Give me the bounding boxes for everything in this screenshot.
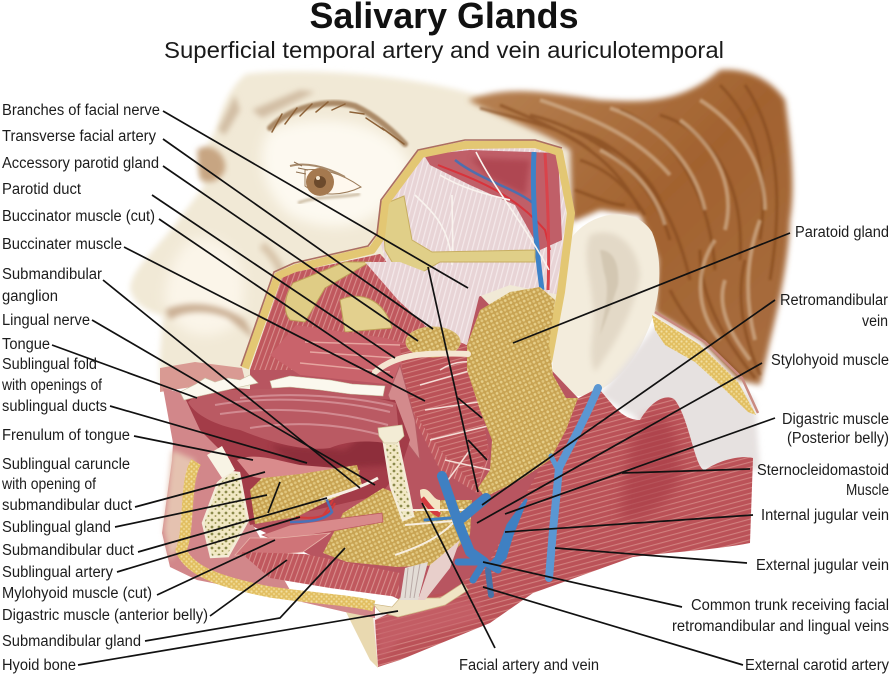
label: Branches of facial nerve: Branches of facial nerve bbox=[2, 102, 160, 119]
label: Internal jugular vein: Internal jugular vein bbox=[761, 507, 889, 524]
internal jugular vein bbox=[488, 500, 526, 570]
label: Buccinator muscle (cut) bbox=[2, 208, 393, 378]
label: Hyoid bone bbox=[2, 611, 398, 674]
lower front tooth bbox=[207, 446, 235, 478]
label: Common trunk bbox=[483, 562, 889, 635]
eyebrow bbox=[270, 102, 405, 144]
label: Transverse facial artery: Transverse facial artery bbox=[2, 128, 156, 145]
oral cavity and floor of mouth bbox=[186, 388, 410, 525]
upper teeth bbox=[180, 375, 385, 400]
label: Retromandibular vein: vein bbox=[862, 313, 888, 330]
mandible front section bbox=[203, 472, 248, 557]
label: Parotid duct: Parotid duct bbox=[2, 181, 82, 198]
label: Sternocleidomastoid Muscle: Muscle bbox=[846, 482, 889, 499]
label: Digastric muscle (anterior belly): Digastric muscle (anterior belly) bbox=[2, 607, 208, 624]
label: Common trunk: retromandibular and lingual veins bbox=[672, 618, 889, 635]
label: Facial artery and vein bbox=[422, 503, 599, 674]
label: External carotid artery: External carotid artery bbox=[745, 657, 889, 674]
submandibular duct and sublingual artery bbox=[262, 478, 383, 542]
hyoid bone and tendon bbox=[373, 510, 470, 617]
external jugular vein bbox=[549, 388, 598, 578]
veins bbox=[425, 388, 598, 595]
label: Buccinater muscle bbox=[2, 236, 425, 401]
label: Transverse facial artery bbox=[2, 128, 433, 329]
label: Sublingual gland bbox=[2, 482, 280, 536]
label: Sublingual gland: Sublingual gland bbox=[2, 519, 111, 536]
label: Submandibular ganglion bbox=[2, 266, 360, 488]
label: Facial artery and vein: Facial artery and vein bbox=[459, 657, 599, 674]
label: Mylohyoid muscle (cut) bbox=[2, 540, 275, 602]
label: Sublingual caruncle: with opening of bbox=[1, 476, 97, 493]
ear bbox=[552, 214, 659, 396]
cheek muscles bbox=[250, 254, 492, 495]
label: External jugular vein: External jugular vein bbox=[756, 557, 889, 574]
lips and upper gum bbox=[160, 362, 245, 392]
label: Retromandibular vein bbox=[482, 292, 888, 505]
yellow fat border of dissection bbox=[245, 144, 571, 368]
label: Digastric muscle (anterior belly) bbox=[2, 560, 287, 624]
label: Sublingual caruncle: submandibular duct bbox=[2, 497, 133, 514]
label: Tongue: Tongue bbox=[2, 336, 50, 353]
label: Sublingual fold with openings of sublingual ducts: sublingual ducts bbox=[2, 398, 107, 415]
label: Buccinater muscle: Buccinater muscle bbox=[2, 236, 122, 253]
label: Internal jugular vein bbox=[505, 507, 889, 532]
label: Digastric muscle (Posterior belly) bbox=[505, 411, 889, 514]
label: Digastric muscle (Posterior belly): Digastric muscle bbox=[782, 411, 889, 428]
label: Sublingual caruncle bbox=[1, 456, 265, 514]
eye bbox=[290, 162, 361, 203]
label: Sublingual artery bbox=[2, 517, 300, 581]
neck skin fold: yellow fat edge bbox=[652, 312, 758, 415]
neck upper white fascia bbox=[600, 320, 760, 470]
facial artery stump bbox=[420, 489, 440, 515]
zygomatic arch bbox=[382, 196, 535, 278]
label: Submandibular gland: Submandibular gland bbox=[2, 633, 141, 650]
label: Sublingual fold with openings of sublingual ducts bbox=[1, 356, 307, 463]
facial nerve pointer lines bbox=[428, 267, 487, 492]
frenulum and sublingual fold bbox=[237, 457, 360, 480]
neck muscle: sternocleidomastoid bbox=[375, 388, 753, 667]
label: Mylohyoid muscle (cut): Mylohyoid muscle (cut) bbox=[2, 585, 152, 602]
subtitle: Superficial temporal artery and vein auriculotemporal bbox=[164, 37, 724, 63]
submandibular gland bbox=[323, 488, 472, 567]
parotid gland bbox=[467, 287, 578, 497]
label: Submandibular ganglion: ganglion bbox=[2, 288, 58, 305]
label: Stylohyoid muscle bbox=[477, 352, 889, 523]
tongue bbox=[188, 389, 400, 449]
hair bbox=[468, 70, 792, 385]
illustration: dissected head bbox=[130, 70, 792, 668]
hair strands light bbox=[540, 100, 765, 360]
face highlights and shading bbox=[262, 120, 410, 227]
label: Paratoid gland: Paratoid gland bbox=[795, 224, 889, 241]
retromandibular vein and branches bbox=[425, 476, 498, 595]
label: Retromandibular vein: Retromandibular bbox=[780, 292, 888, 309]
face skin bbox=[130, 72, 575, 390]
right labels bbox=[477, 224, 889, 674]
label: Sternocleidomastoid Muscle: Sternocleidomastoid bbox=[757, 462, 889, 479]
label: Submandibular ganglion: Submandibular bbox=[2, 266, 102, 283]
digastric anterior belly bbox=[240, 552, 400, 597]
accessory parotid gland bbox=[406, 327, 460, 357]
parotid duct bbox=[375, 353, 468, 372]
label: Accessory parotid gland bbox=[2, 155, 418, 341]
mandible ramus section bbox=[378, 425, 413, 520]
label: Digastric muscle (Posterior belly): (Posterior belly) bbox=[787, 430, 889, 447]
label: Lingual nerve bbox=[2, 312, 375, 485]
label: External carotid artery bbox=[483, 587, 889, 674]
chin and jaw tissue bbox=[162, 388, 375, 618]
label: Tongue bbox=[2, 336, 197, 398]
mylohyoid muscle bbox=[235, 533, 330, 556]
label: Buccinator muscle (cut): Buccinator muscle (cut) bbox=[2, 208, 155, 225]
label: Sublingual caruncle: Sublingual caruncle bbox=[2, 456, 130, 473]
label: Hyoid bone: Hyoid bone bbox=[2, 657, 76, 674]
label: Sublingual fold with openings of sublingual ducts: with openings of bbox=[1, 377, 103, 394]
lower neck edge strip bbox=[345, 606, 378, 668]
label: Branches of facial nerve bbox=[2, 102, 468, 288]
label: Submandibular gland bbox=[2, 548, 345, 650]
label: Common trunk: Common trunk receiving facial bbox=[691, 597, 889, 614]
label: Frenulum of tongue bbox=[2, 427, 253, 460]
label: External jugular vein bbox=[555, 548, 889, 574]
label: Accessory parotid gland: Accessory parotid gland bbox=[2, 155, 159, 172]
label: Sublingual fold with openings of sublingual ducts: Sublingual fold bbox=[2, 356, 97, 373]
base of dissected deep tissue bbox=[250, 254, 578, 600]
hair strands dark bbox=[480, 85, 777, 378]
left labels bbox=[1, 102, 468, 674]
label: Frenulum of tongue: Frenulum of tongue bbox=[2, 427, 130, 444]
label: Sternocleidomastoid Muscle bbox=[622, 462, 889, 499]
yellow fat band of the jaw bbox=[181, 462, 374, 606]
temporal window bbox=[380, 146, 566, 300]
sublingual gland bbox=[250, 465, 362, 524]
label: Stylohyoid muscle: Stylohyoid muscle bbox=[771, 352, 889, 369]
label: Submandibular duct: Submandibular duct bbox=[2, 542, 135, 559]
label: Submandibular duct bbox=[2, 498, 327, 559]
label: Paratoid gland bbox=[513, 224, 889, 343]
label: Lingual nerve: Lingual nerve bbox=[2, 312, 90, 329]
label: Sublingual artery: Sublingual artery bbox=[2, 564, 113, 581]
label: Parotid duct bbox=[2, 181, 395, 358]
